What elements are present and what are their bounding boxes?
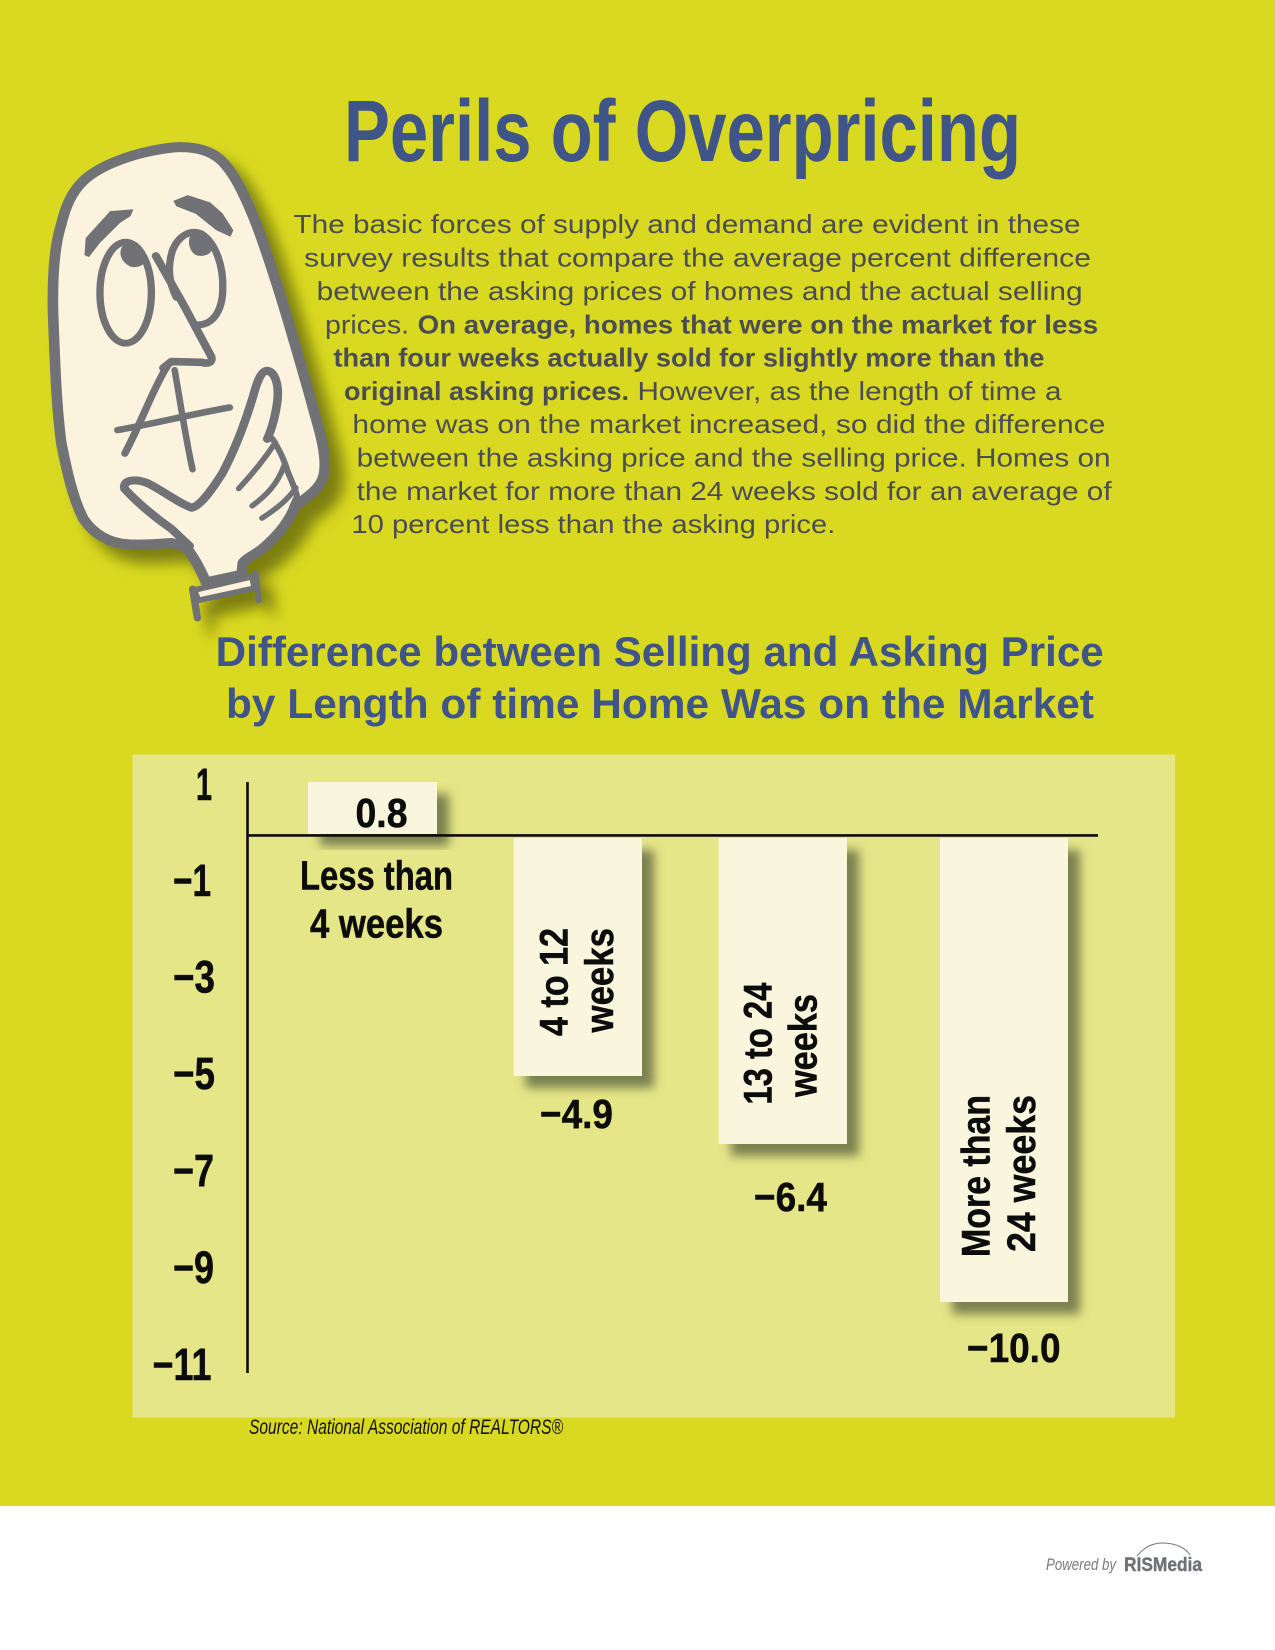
value and category labels: −6.4 <box>754 1174 827 1220</box>
intro paragraph <box>294 209 1112 539</box>
intro paragraph: between the asking price and the selling price. Homes on <box>357 442 1111 472</box>
footer logo: Powered by RISMedia: Powered by <box>1046 1555 1117 1574</box>
rotated bar labels: 24 weeks <box>1000 1095 1044 1252</box>
rotated bar labels: weeks <box>578 928 622 1033</box>
chart heading: Difference between Selling and Asking Price <box>216 628 1104 675</box>
intro paragraph: 10 percent less than the asking price. <box>351 509 835 539</box>
bar: 13 to 24 weeks <box>719 838 847 1144</box>
title: Perils of Overpricing <box>344 83 1021 180</box>
value and category labels: −4.9 <box>540 1091 613 1137</box>
intro paragraph: than four weeks actually sold for slightly more than the <box>334 343 1044 373</box>
value and category labels: −10.0 <box>967 1325 1060 1371</box>
footer logo: Powered by RISMedia <box>1046 1543 1202 1576</box>
intro paragraph: However, as the length of time a <box>638 376 1062 406</box>
bar: more than 24 weeks <box>940 838 1068 1302</box>
intro paragraph: survey results that compare the average percent difference <box>304 242 1091 272</box>
y axis labels <box>152 759 215 1390</box>
chart heading <box>216 628 1104 727</box>
nose <box>156 256 212 368</box>
pupils and eyebrows <box>84 195 233 267</box>
mouth <box>125 366 167 453</box>
hand and chin line <box>124 371 278 546</box>
intro paragraph: between the asking prices of homes and the actual selling <box>317 276 1083 306</box>
shirt collar <box>193 573 259 618</box>
bar chart <box>152 759 1098 1390</box>
intro paragraph: home was on the market increased, so did the difference <box>352 409 1105 439</box>
eyes <box>100 242 151 343</box>
intro paragraph: original asking prices. <box>344 376 629 406</box>
y axis labels: −1 <box>173 855 211 906</box>
intro paragraph: the market for more than 24 weeks sold for an average of <box>357 476 1112 506</box>
y axis labels: −9 <box>173 1242 214 1293</box>
illustration: worried face with hand on chin <box>53 147 325 618</box>
y axis labels: −7 <box>173 1145 214 1196</box>
rotated bar labels <box>532 928 1044 1257</box>
rotated bar labels: 4 to 12 <box>532 928 576 1036</box>
value and category labels: 0.8 <box>356 790 408 836</box>
y axis labels: −3 <box>173 952 215 1002</box>
y axis labels: 1 <box>196 759 212 810</box>
rotated bar labels: More than <box>954 1095 998 1257</box>
footer logo: Powered by RISMedia: RISMedia <box>1124 1555 1202 1576</box>
intro paragraph: The basic forces of supply and demand are evident in these <box>294 209 1080 239</box>
value and category labels: 4 weeks <box>310 900 443 946</box>
bar: 4 to 12 weeks <box>514 838 642 1076</box>
bar: less than 4 weeks <box>308 782 437 834</box>
axes <box>248 782 1098 1373</box>
intro paragraph: prices. <box>325 309 409 339</box>
y axis labels: −5 <box>173 1048 215 1099</box>
y axis labels: −11 <box>152 1339 212 1390</box>
intro paragraph: On average, homes that were on the market for less <box>418 309 1098 339</box>
source note: Source: National Association of REALTORS® <box>249 1416 563 1439</box>
chart heading: by Length of time Home Was on the Market <box>226 680 1094 727</box>
rotated bar labels: 13 to 24 <box>736 982 780 1105</box>
value and category labels: Less than <box>300 853 453 899</box>
rotated bar labels: weeks <box>782 994 826 1098</box>
value and category labels <box>300 790 1060 1371</box>
chart panel background <box>132 754 1175 1418</box>
